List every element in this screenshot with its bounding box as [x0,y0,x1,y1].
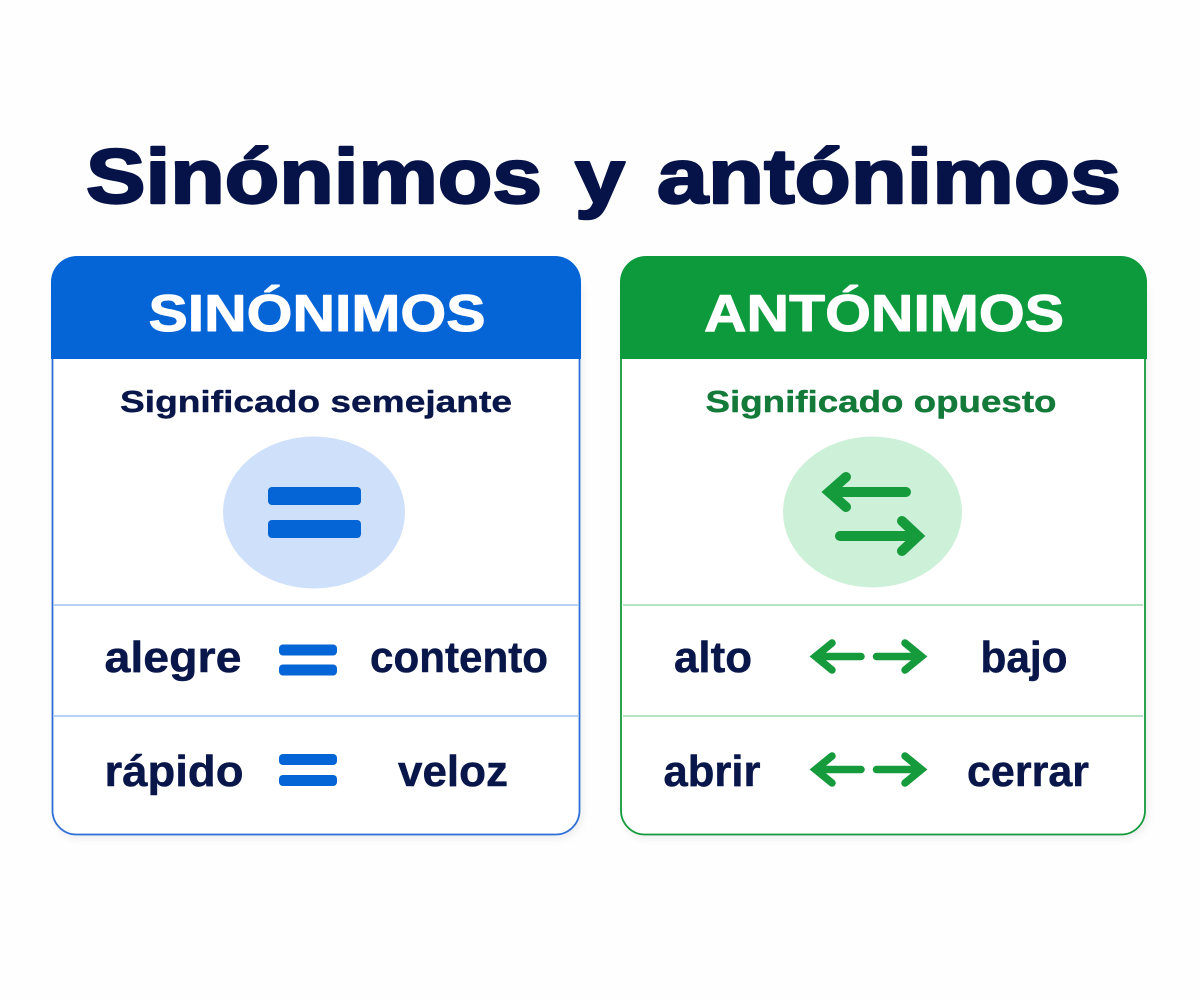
panel: sinónimos [51,256,581,834]
row: alto ↔ bajo [674,633,1068,682]
panel header: antónimos [620,256,1147,359]
heading: sinónimos: SINÓNIMOS [148,285,486,343]
row: rápido = veloz: rápido [104,747,244,796]
icon: double arrows [816,756,922,783]
row: alegre = contento: alegre [104,633,242,682]
heading: antónimos: ANTÓNIMOS [704,285,1064,343]
row: abrir ↔ cerrar: abrir [664,747,760,796]
subtitle: significado semejante: Significado semejante [120,384,512,419]
title: antónimos [657,134,1121,220]
row: alegre = contento [104,633,548,682]
icon: opposite arrows in circle [783,436,962,588]
row: abrir ↔ cerrar: cerrar [967,747,1089,796]
title: Sinónimos [86,134,542,220]
row: abrir ↔ cerrar [664,747,1089,796]
row: alegre = contento: contento [370,633,548,682]
row: alto ↔ bajo: bajo [980,633,1068,682]
panel: antónimos [620,256,1147,834]
title: y [575,134,625,220]
subtitle: significado opuesto: Significado opuesto [706,384,1056,419]
icon: equals in circle [223,436,405,588]
icon: double arrows [816,643,922,670]
title [86,134,1121,220]
panel header: sinónimos [51,256,581,359]
row: alto ↔ bajo: alto [674,633,752,682]
row: rápido = veloz: veloz [398,747,508,796]
row: rápido = veloz [104,747,508,796]
